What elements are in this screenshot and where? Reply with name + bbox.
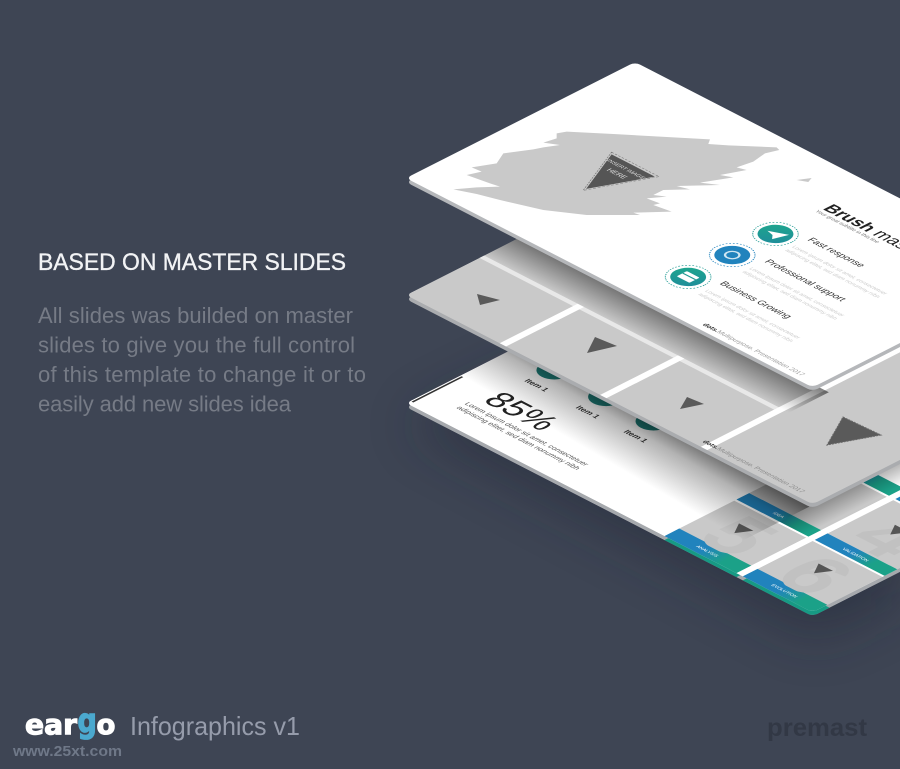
feature: fast response: Fast response <box>804 237 868 269</box>
panel: middle slide with image placeholders <box>409 239 900 507</box>
body text: slides to give you the full control <box>38 332 355 358</box>
placeholder triangles <box>477 294 881 445</box>
icon: professional support <box>700 239 764 271</box>
placeholder triangle with label: INSERT IMAGE <box>604 159 646 180</box>
triangle: third tile <box>680 397 704 409</box>
footer text: dots.Multipurpose. Presentation 2017 <box>700 440 806 494</box>
tile labels: ANALYSIS <box>694 545 720 558</box>
slide edge: top <box>406 66 900 391</box>
tile labels: IDEA <box>770 511 786 520</box>
feature: business growing <box>696 280 819 343</box>
logo: eargo: g <box>78 702 97 741</box>
shadow from middle slide right edge <box>780 464 900 532</box>
icon: business growing <box>656 261 720 293</box>
tile grid <box>466 352 900 611</box>
tile digits: 6 <box>754 545 874 606</box>
tile digits: 5 <box>678 506 798 567</box>
feature: professional support: adipiscing elitet, sed diam nonummy nibh <box>740 270 838 321</box>
feature: professional support: Professional support <box>761 258 849 303</box>
feature: fast response: adipiscing elitet, sed diam nonummy nibh <box>783 249 881 299</box>
item labels: Item 1 <box>522 378 551 393</box>
panel: top slide with brush and feature list <box>406 62 900 391</box>
item circles <box>536 366 660 430</box>
slide surface: middle <box>409 239 900 503</box>
feature: business growing: Lorem ipsum dolor sit amet, consectetuer <box>703 289 801 340</box>
shadow from top slide <box>484 235 829 413</box>
product name: Infographics v1 <box>130 711 300 741</box>
tile labels: VALIDATION <box>840 547 871 563</box>
body text: easily add new slides idea <box>38 392 292 416</box>
logo: eargo: ear <box>25 709 77 741</box>
tile placeholder triangles <box>734 524 900 574</box>
tile digits <box>704 536 858 592</box>
logo: eargo: o <box>96 709 115 741</box>
brush stroke image placeholder <box>453 132 812 215</box>
body text: All slides was builded on master <box>38 303 353 328</box>
placeholder triangle with label: HERE <box>604 167 629 180</box>
accent line <box>412 376 463 402</box>
feature: fast response <box>783 236 900 299</box>
slide surface: bottom <box>409 352 900 611</box>
item labels: Item 1 <box>573 405 603 420</box>
slide surface: top <box>406 62 900 387</box>
footer text: dots.Multipurpose. Presentation 2017 <box>700 323 806 377</box>
logo: eargo <box>25 702 115 741</box>
tile labels: EVOLUTION <box>769 583 799 599</box>
shadow from middle slide <box>466 352 810 537</box>
feature: business growing: Business Growing <box>716 280 794 320</box>
body text: of this template to change it or to <box>38 362 366 387</box>
watermark: www.25xt.com <box>12 743 122 760</box>
feature: fast response: Lorem ipsum dolor sit amet, consectetuer <box>790 245 888 296</box>
slide edge: bottom <box>409 405 900 615</box>
drop shadow under slide stack <box>407 310 900 640</box>
percent description: Lorem ipsum dolor sit amet, consectetuer <box>462 401 592 467</box>
tile labels <box>694 509 871 599</box>
grid dividers <box>479 256 783 412</box>
triangle: second tile <box>587 337 617 353</box>
slide content: top <box>486 119 900 377</box>
feature: professional support: Lorem ipsum dolor sit amet, consectetuer <box>747 267 845 318</box>
feature: professional support <box>740 258 863 321</box>
body text <box>38 303 366 416</box>
percent value: 85% <box>475 388 567 435</box>
slide edge: middle <box>406 183 900 508</box>
feature: business growing: adipiscing elitet, sed diam nonummy nibh <box>696 293 794 343</box>
item labels: Item 1 <box>621 429 650 444</box>
heading: BASED ON MASTER SLIDES <box>38 249 346 276</box>
item labels <box>522 378 650 444</box>
triangle: large tile <box>827 417 881 445</box>
icon: fast response <box>743 218 808 250</box>
triangle: first tile <box>477 294 500 305</box>
percent description: adipiscing elitet, sed diam nonummy nibh <box>454 405 583 471</box>
logo: premast: premast <box>767 714 868 742</box>
placeholder triangle with label <box>560 152 659 203</box>
slide subtitle: Your great subtitle in this line <box>813 210 881 244</box>
